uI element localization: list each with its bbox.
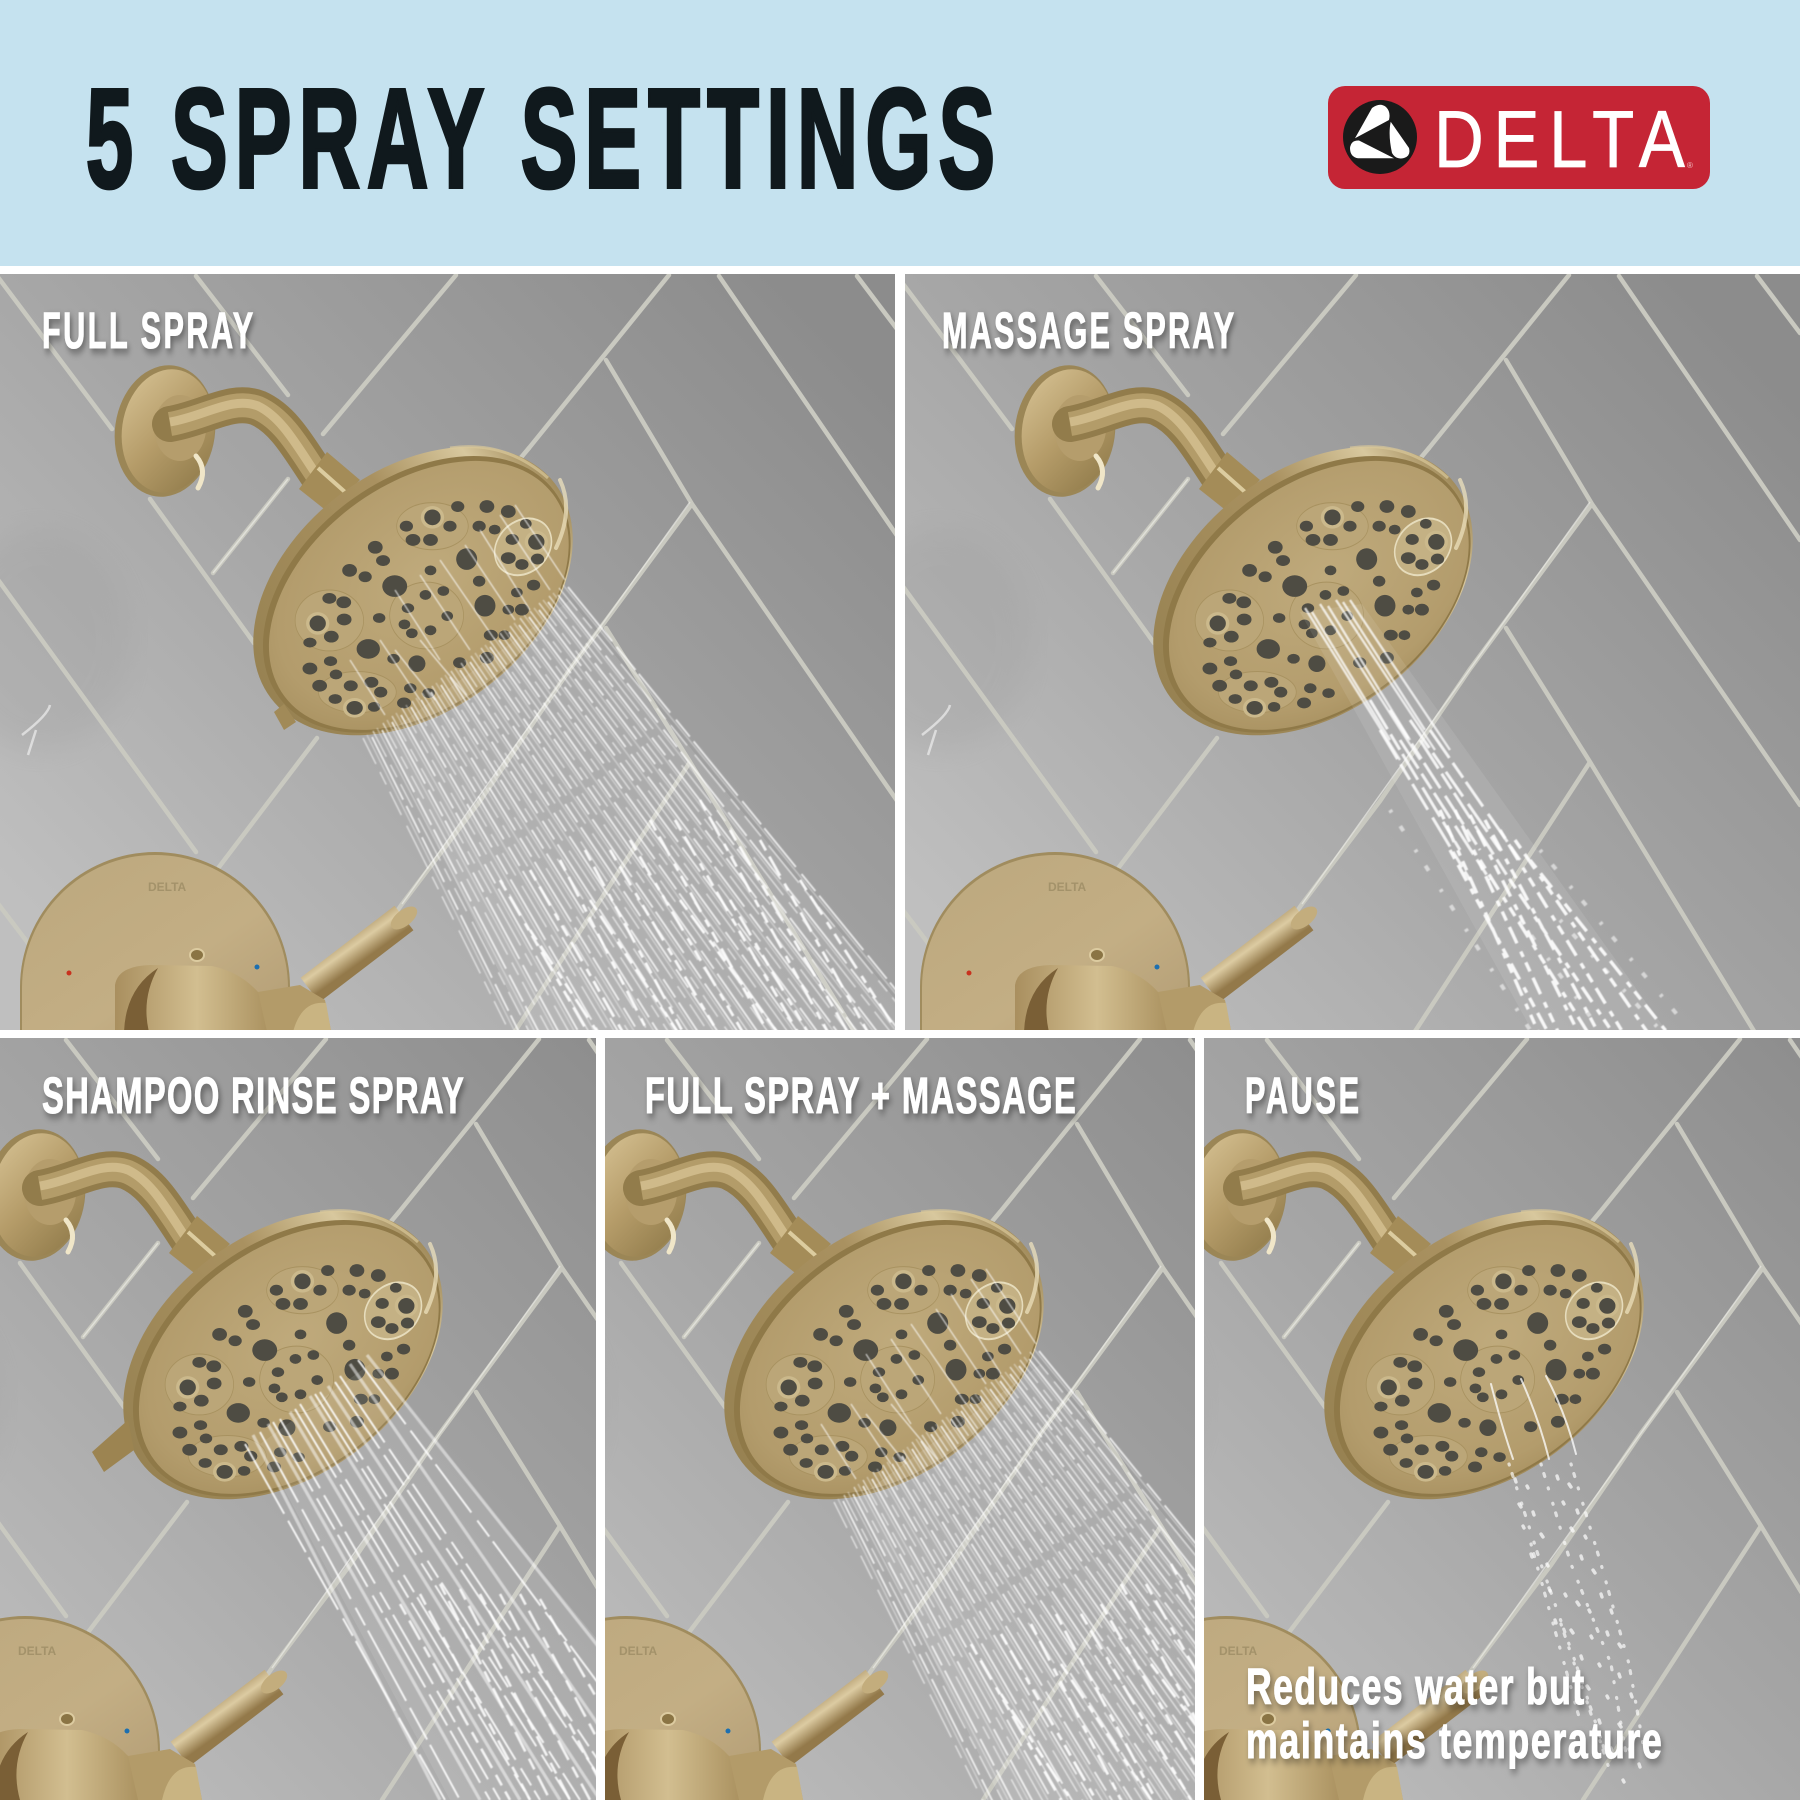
plate brand mark: DELTA	[619, 1644, 658, 1658]
heading: shampoo rinse spray: SHAMPOO RINSE SPRAY	[42, 1068, 464, 1125]
note: pause description: Reduces water but	[1246, 1659, 1584, 1716]
heading: pause: PAUSE	[1245, 1067, 1359, 1124]
plate brand mark: DELTA	[148, 880, 187, 894]
water: massage spray	[1300, 600, 1690, 1036]
plate brand mark: DELTA	[1219, 1644, 1258, 1658]
water: full spray + massage	[820, 1268, 1195, 1800]
water: full spray	[350, 505, 935, 1039]
panel: full spray	[0, 274, 895, 1030]
note: pause description: maintains temperature	[1246, 1713, 1662, 1770]
plate brand mark: DELTA	[1048, 880, 1087, 894]
panel: full spray + massage	[605, 1038, 1195, 1800]
heading: full spray: FULL SPRAY	[42, 302, 253, 359]
plate brand mark: DELTA	[18, 1644, 57, 1658]
panel: massage spray	[905, 274, 1800, 1030]
title: 5 SPRAY SETTINGS	[86, 60, 995, 217]
logo: Delta	[1328, 86, 1710, 189]
logo: Delta: DELTA	[1434, 94, 1685, 184]
lever nub	[274, 704, 296, 730]
note: pause description	[1246, 1659, 1662, 1770]
logo: Delta: ®	[1687, 161, 1693, 170]
water: shampoo rinse spray	[244, 1354, 596, 1800]
panel: shampoo rinse spray	[0, 1038, 596, 1800]
water: pause	[1491, 1376, 1643, 1782]
heading: full spray + massage: FULL SPRAY + MASSAGE	[645, 1068, 1076, 1125]
heading: massage spray: MASSAGE SPRAY	[942, 302, 1234, 359]
panel: pause	[1204, 1038, 1800, 1800]
header band	[0, 0, 1800, 266]
diverter lever	[92, 1420, 134, 1472]
